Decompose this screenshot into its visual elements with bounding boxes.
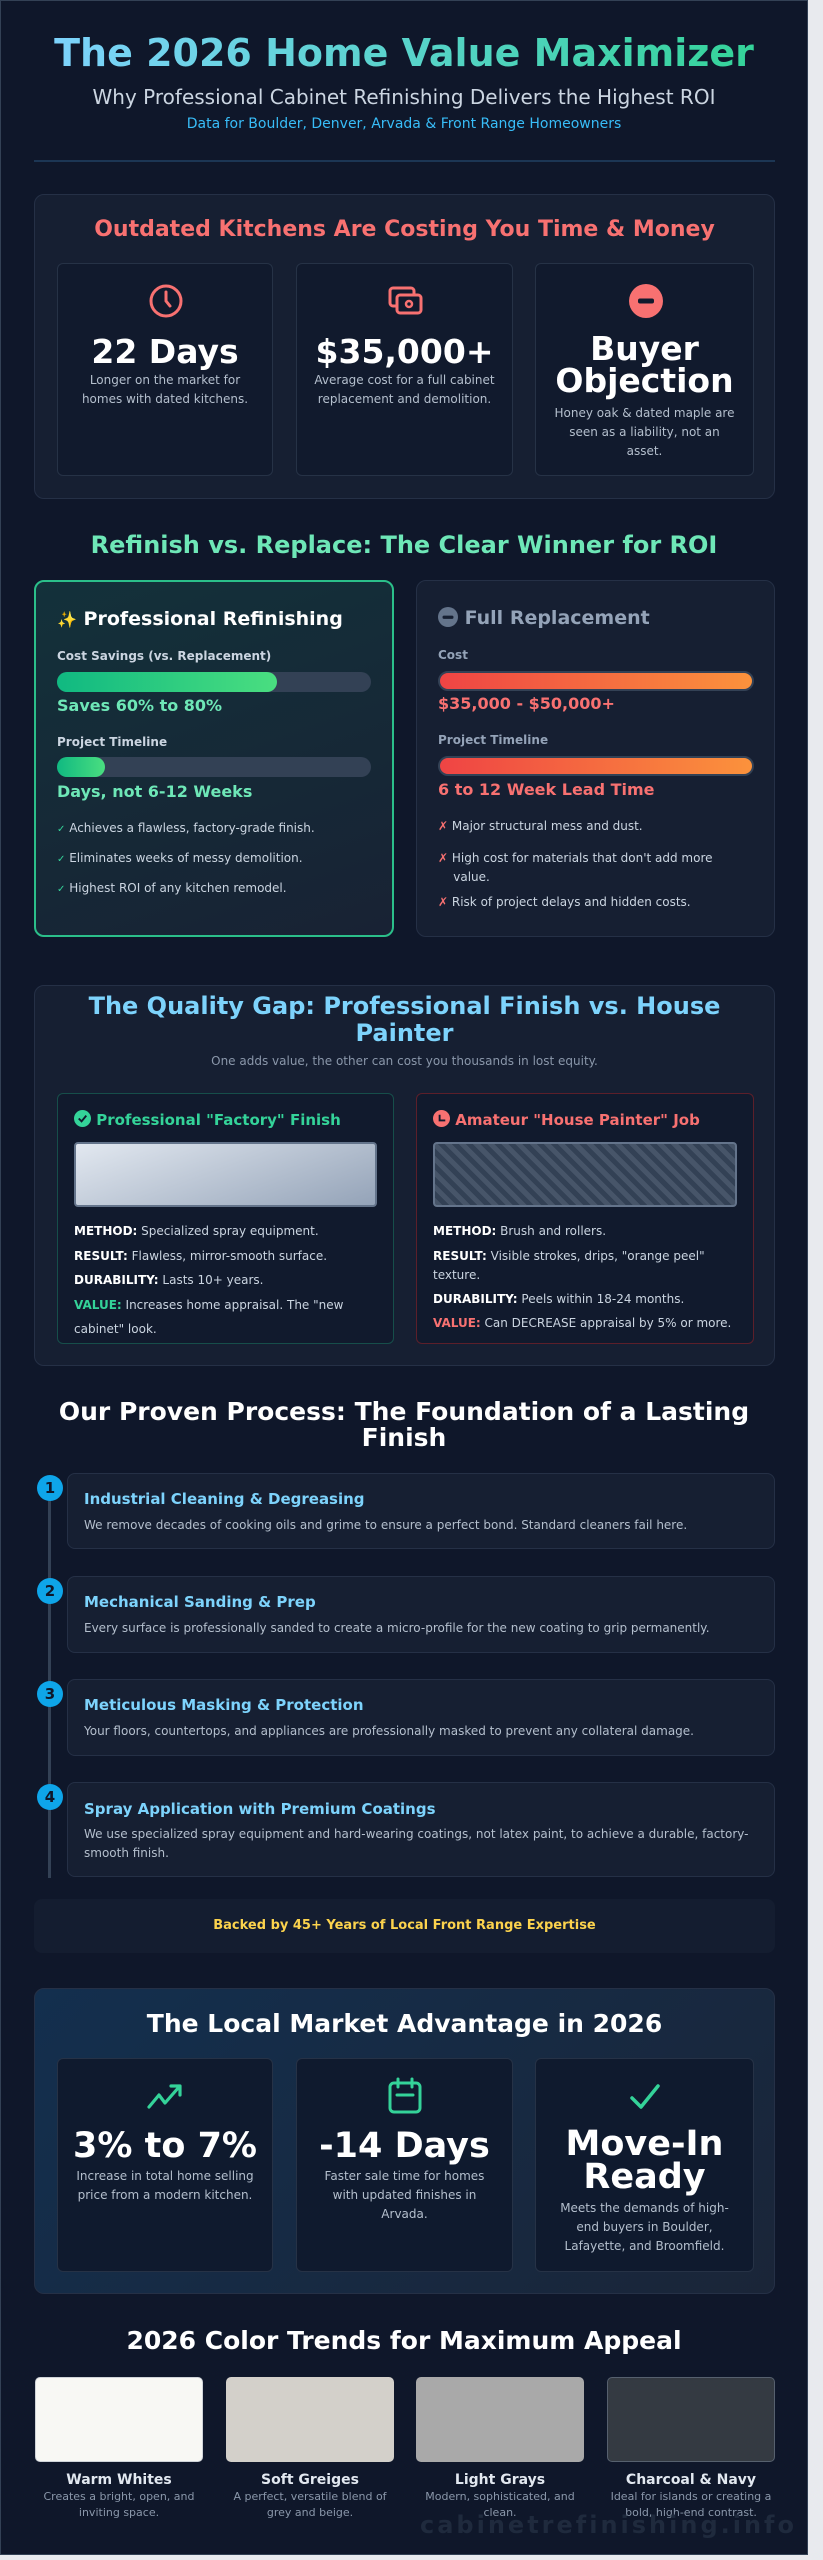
drawbacks list xyxy=(438,819,713,909)
icon: check xyxy=(630,2084,660,2109)
heading: refinish vs replace: Refinish vs. Replace: The Clear Winner for ROI xyxy=(91,531,717,559)
header: professional refinishing: ✨ Professional Refinishing xyxy=(57,608,343,630)
stat card: buyer objection: Buyer xyxy=(590,329,699,368)
swatch: soft greiges: Soft Greiges xyxy=(261,2472,359,2488)
step 4: We use specialized spray equipment and hard-wearing coatings, not latex paint, to achieve a durable, factory-smooth finish. xyxy=(84,1827,749,1860)
step 1: Industrial Cleaning & Degreasing xyxy=(84,1490,365,1508)
step 3: Meticulous Masking & Protection xyxy=(84,1696,364,1714)
panel: professional refinishing: ✓ Achieves a flawless, factory-grade finish. xyxy=(57,821,315,835)
swatch: charcoal navy: bold, high-end contrast. xyxy=(625,2506,757,2519)
stat card: -14 days: with updated finishes in xyxy=(333,2188,476,2202)
panel: full replacement: $35,000 - $50,000+ xyxy=(438,694,615,713)
badge 4: 4 xyxy=(45,1788,55,1806)
drawbacks list: value. xyxy=(453,870,490,884)
stat card: 22 days: homes with dated kitchens. xyxy=(82,392,248,406)
badge 3 xyxy=(37,1681,63,1707)
step 2: Mechanical Sanding & Prep xyxy=(84,1593,316,1611)
swatch: light grays xyxy=(416,2377,584,2519)
heading: local market: The Local Market Advantage in 2026 xyxy=(147,2009,662,2038)
panel: outdated kitchens xyxy=(34,194,775,499)
step 4: Spray Application with Premium Coatings xyxy=(84,1800,436,1818)
heading: process xyxy=(59,1397,749,1452)
swatch: soft greiges: grey and beige. xyxy=(267,2506,353,2519)
swatch: soft greiges xyxy=(226,2377,394,2519)
stat card: buyer objection: Objection xyxy=(555,361,734,400)
swatch: light grays: Light Grays xyxy=(455,2472,545,2488)
stat card: move-in ready: Lafayette, and Broomfield. xyxy=(565,2239,724,2253)
stat card: buyer objection xyxy=(535,263,754,476)
bar: cost xyxy=(438,671,754,691)
stat card: -14 days xyxy=(296,2058,513,2272)
heading: process: Our Proven Process: The Foundation of a Lasting xyxy=(59,1397,749,1426)
card: amateur: METHOD: Brush and rollers. xyxy=(433,1224,606,1238)
step 1: We remove decades of cooking oils and grime to ensure a perfect bond. Standard cleaners fail here. xyxy=(84,1518,687,1532)
stat card: buyer objection: Honey oak & dated maple are xyxy=(554,406,734,420)
stat card: 35000: replacement and demolition. xyxy=(318,392,491,406)
swatch: warm whites xyxy=(35,2377,203,2519)
banner: expertise xyxy=(34,1899,775,1953)
stat card: move-in ready: end buyers in Boulder, xyxy=(576,2220,713,2234)
card: amateur: DURABILITY: Peels within 18-24 months. xyxy=(433,1292,684,1306)
heading: color trends: 2026 Color Trends for Maximum Appeal xyxy=(126,2326,682,2355)
swatch: light grays: clean. xyxy=(483,2506,517,2519)
icon: clock xyxy=(150,284,182,318)
bar: timeline xyxy=(438,756,754,776)
icon: calendar xyxy=(388,2078,422,2114)
swatch: warm whites: Warm Whites xyxy=(66,2472,172,2488)
panel: quality gap: One adds value, the other can cost you thousands in lost equity. xyxy=(211,1054,598,1068)
heading: outdated kitchens: Outdated Kitchens Are Costing You Time & Money xyxy=(94,217,715,242)
bar: cost savings xyxy=(57,672,371,692)
header: professional: Professional "Factory" Finish xyxy=(96,1111,341,1129)
tagline: Data for Boulder, Denver, Arvada & Front Range Homeowners xyxy=(187,116,621,132)
icon: money xyxy=(388,286,422,314)
panel: professional refinishing: ✓ Highest ROI of any kitchen remodel. xyxy=(57,881,287,895)
stat card: -14 days: Faster sale time for homes xyxy=(325,2169,484,2183)
swatch: streaky xyxy=(433,1142,737,1207)
stat card: 3-7%: Increase in total home selling xyxy=(76,2169,254,2183)
panel: full replacement: Project Timeline xyxy=(438,733,548,747)
icon: trend up xyxy=(147,2084,182,2109)
stat card: -14 days: -14 Days xyxy=(319,2126,490,2166)
stat card: 22 days xyxy=(57,263,273,476)
stat card: move-in ready: Move-In xyxy=(566,2124,723,2164)
badge 2 xyxy=(37,1578,63,1604)
card: professional finish: DURABILITY: Lasts 10+ years. xyxy=(74,1273,263,1287)
card: professional finish: VALUE: Increases home appraisal. The "new cabinet" look. xyxy=(74,1298,343,1336)
swatch: charcoal navy: Ideal for islands or creating a xyxy=(611,2490,771,2503)
card: professional finish: METHOD: Specialized spray equipment. xyxy=(74,1224,319,1238)
card: amateur: VALUE: Can DECREASE appraisal by 5% or more. xyxy=(433,1316,731,1330)
panel: professional refinishing: Project Timeline xyxy=(57,735,167,749)
step 3: Your floors, countertops, and appliances are professionally masked to prevent any collateral damage. xyxy=(84,1724,694,1738)
panel: local market xyxy=(34,1988,775,2294)
card: professional finish: RESULT: Flawless, mirror-smooth surface. xyxy=(74,1248,327,1262)
swatch: light grays: Modern, sophisticated, and xyxy=(425,2490,575,2503)
badge 1: 1 xyxy=(45,1479,55,1497)
panel: full replacement: 6 to 12 Week Lead Time xyxy=(438,780,655,799)
icon: minus circle xyxy=(629,284,663,318)
bar: timeline xyxy=(57,757,371,777)
header: amateur: Amateur "House Painter" Job xyxy=(455,1111,700,1129)
stat card: 3-7%: price from a modern kitchen. xyxy=(78,2188,252,2202)
swatch: smooth xyxy=(74,1142,377,1207)
header: full replacement: Full Replacement xyxy=(465,607,650,629)
card: amateur: RESULT: Visible strokes, drips, "orange peel" texture. xyxy=(433,1248,705,1282)
badge 2: 2 xyxy=(45,1582,55,1600)
panel: professional refinishing: Saves 60% to 80% xyxy=(57,696,222,715)
drawbacks list: ✗ High cost for materials that don't add more xyxy=(438,851,713,865)
timeline line xyxy=(48,1490,51,1878)
step 3 xyxy=(67,1679,775,1756)
step 1 xyxy=(67,1473,775,1549)
benefits list xyxy=(57,821,315,895)
swatch: soft greiges: A perfect, versatile blend of xyxy=(233,2490,387,2503)
badge 4 xyxy=(37,1784,63,1810)
stat card: buyer objection: seen as a liability, not an xyxy=(569,425,720,439)
card: amateur xyxy=(416,1093,754,1344)
stat card: 22 days: Longer on the market for xyxy=(90,373,240,387)
heading: process: Finish xyxy=(362,1423,446,1452)
stat card: 35000: $35,000+ xyxy=(316,332,493,371)
stat card: 35000 xyxy=(296,263,513,476)
stat card: 35000: Average cost for a full cabinet xyxy=(314,373,495,387)
badge 1 xyxy=(37,1475,63,1501)
heading: quality gap xyxy=(88,992,720,1047)
stat card: move-in ready: Ready xyxy=(583,2157,706,2197)
panel: quality gap xyxy=(34,985,775,1366)
panel: full replacement: Cost xyxy=(438,648,468,662)
panel: full replacement xyxy=(416,580,775,937)
badge 3: 3 xyxy=(45,1685,55,1703)
panel: professional refinishing xyxy=(34,580,394,937)
panel: professional refinishing: Days, not 6-12 Weeks xyxy=(57,782,252,801)
card: professional finish xyxy=(57,1093,394,1344)
stat card: 3-7% xyxy=(57,2058,273,2272)
step 2 xyxy=(67,1576,775,1653)
stat card: move-in ready xyxy=(535,2058,754,2272)
title: The 2026 Home Value Maximizer xyxy=(54,31,754,75)
stat card: 22 days: 22 Days xyxy=(91,332,239,371)
stat card: buyer objection: asset. xyxy=(627,444,662,458)
swatch: charcoal navy: Charcoal & Navy xyxy=(626,2472,756,2488)
subtitle: Why Professional Cabinet Refinishing Delivers the Highest ROI xyxy=(93,85,715,109)
swatch: warm whites: inviting space. xyxy=(79,2506,159,2519)
step 4 xyxy=(67,1782,775,1877)
step 2: Every surface is professionally sanded to create a micro-profile for the new coating to grip permanently. xyxy=(84,1621,710,1635)
swatch: warm whites: Creates a bright, open, and xyxy=(44,2490,194,2503)
drawbacks list: ✗ Major structural mess and dust. xyxy=(438,819,643,833)
swatch: charcoal navy xyxy=(607,2377,775,2519)
stat card: -14 days: Arvada. xyxy=(381,2207,428,2221)
heading: quality gap: The Quality Gap: Professional Finish vs. House xyxy=(89,992,720,1020)
heading: quality gap: Painter xyxy=(355,1019,454,1047)
stat card: move-in ready: Meets the demands of high- xyxy=(560,2201,729,2215)
panel: professional refinishing: Cost Savings (vs. Replacement) xyxy=(57,649,271,663)
watermark: cabinetrefinishing.info xyxy=(420,2511,797,2539)
stat card: 3-7%: 3% to 7% xyxy=(73,2126,257,2166)
banner: expertise: Backed by 45+ Years of Local Front Range Expertise xyxy=(213,1918,596,1933)
drawbacks list: ✗ Risk of project delays and hidden costs. xyxy=(438,895,691,909)
panel: professional refinishing: ✓ Eliminates weeks of messy demolition. xyxy=(57,851,303,865)
